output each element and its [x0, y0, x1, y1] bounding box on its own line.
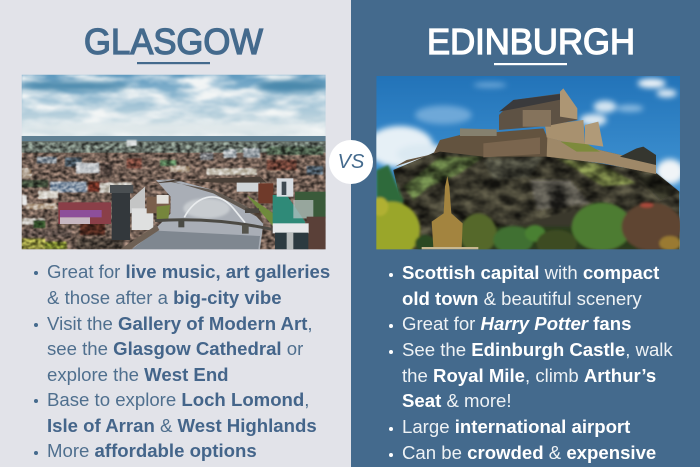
- text block: Glasgow bullet list: More affordable options: [47, 440, 257, 461]
- photo: Glasgow skyline and river: [17, 75, 330, 249]
- rock: [376, 150, 679, 249]
- castle walls: [395, 128, 656, 174]
- title underline: Glasgow: [137, 62, 210, 64]
- VS badge: [329, 140, 373, 184]
- Clyde Arc bridge: [184, 197, 245, 223]
- text block: Glasgow bullet list: & those after a big-city vibe: [47, 287, 282, 308]
- text block: Glasgow bullet list: Isle of Arran & West Highlands: [47, 415, 317, 436]
- dark crane tower: [112, 193, 130, 240]
- text block: Edinburgh bullet list: Large international airport: [402, 416, 630, 437]
- VS badge: VS: [338, 151, 364, 173]
- trees: [376, 164, 680, 250]
- purple building: [58, 202, 111, 224]
- text block: Edinburgh bullet list: Can be crowded & expensive: [402, 442, 656, 463]
- text block: Glasgow bullet list: explore the West End: [47, 364, 229, 385]
- River Clyde: [132, 179, 263, 249]
- far bank: [237, 182, 260, 192]
- title underline: Edinburgh: [494, 63, 567, 65]
- text block: Glasgow bullet list: Great for live music, art galleries: [47, 261, 330, 282]
- text block: Edinburgh bullet list: See the Edinburgh Castle, walk: [402, 339, 673, 360]
- text block: Glasgow bullet list: see the Glasgow Cathedral or: [47, 338, 303, 359]
- panel: Glasgow background: [0, 0, 351, 467]
- ground: [22, 136, 326, 249]
- castle keep: [499, 93, 577, 130]
- artwork: titles, underlines and photos: [22, 28, 680, 250]
- title: EDINBURGH: EDINBURGH: [427, 21, 635, 62]
- text block: Glasgow bullet list: Visit the Gallery of Modern Art,: [47, 313, 313, 334]
- text block: Glasgow bullet list: Base to explore Loch Lomond,: [47, 389, 309, 410]
- text block: Edinburgh bullet list: the Royal Mile, climb Arthur’s: [402, 365, 656, 386]
- text block: Edinburgh bullet list: Great for Harry Potter fans: [402, 313, 631, 334]
- text block: Edinburgh bullet list: Scottish capital with compact: [402, 262, 659, 283]
- city texture: [22, 142, 326, 249]
- green glass building: [272, 195, 306, 224]
- photo: Edinburgh Castle on its rock: [363, 76, 684, 258]
- text block: Edinburgh bullet list: Seat & more!: [402, 390, 512, 411]
- text block: Edinburgh bullet list: old town & beautiful scenery: [402, 288, 642, 309]
- white buildings: [130, 187, 145, 213]
- panel: Edinburgh background: [351, 0, 700, 467]
- title: GLASGOW: GLASGOW: [84, 21, 263, 62]
- Ross Fountain: [432, 176, 463, 247]
